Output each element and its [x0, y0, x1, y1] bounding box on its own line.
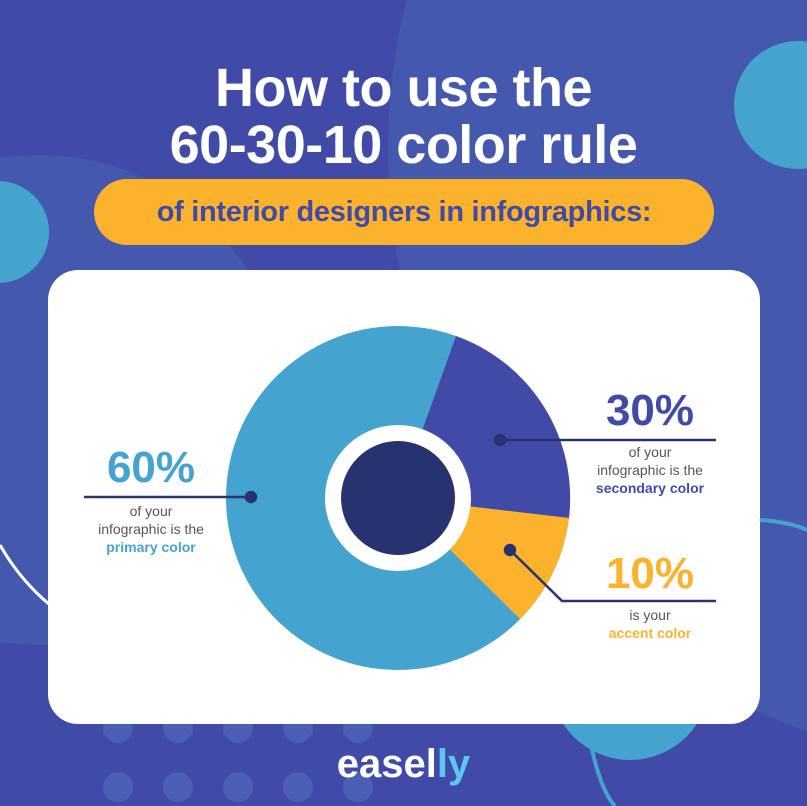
title: How to use the: [215, 58, 592, 118]
title: [170, 58, 637, 175]
label 60%: primary color: [106, 539, 196, 555]
label 10%: [606, 549, 694, 641]
label 60%: of your: [130, 503, 172, 519]
label 60%: [98, 443, 204, 555]
label 30%: [596, 386, 704, 496]
leader lines: [84, 435, 716, 601]
label 10%: 10%: [606, 549, 694, 598]
label 60%: infographic is the: [98, 521, 204, 537]
label 10%: accent color: [609, 625, 691, 641]
label 30%: 30%: [606, 386, 694, 435]
label 30%: of your: [629, 444, 671, 460]
label 30%: secondary color: [596, 480, 704, 496]
label 10%: is your: [629, 607, 671, 623]
label 30%: infographic is the: [597, 462, 703, 478]
logo: easelly: [337, 742, 470, 786]
subtitle pill: [94, 179, 714, 245]
title: 60-30-10 color rule: [170, 115, 637, 175]
card: [48, 270, 760, 724]
label 60%: 60%: [107, 443, 195, 492]
subtitle pill: of interior designers in infographics:: [157, 196, 651, 228]
